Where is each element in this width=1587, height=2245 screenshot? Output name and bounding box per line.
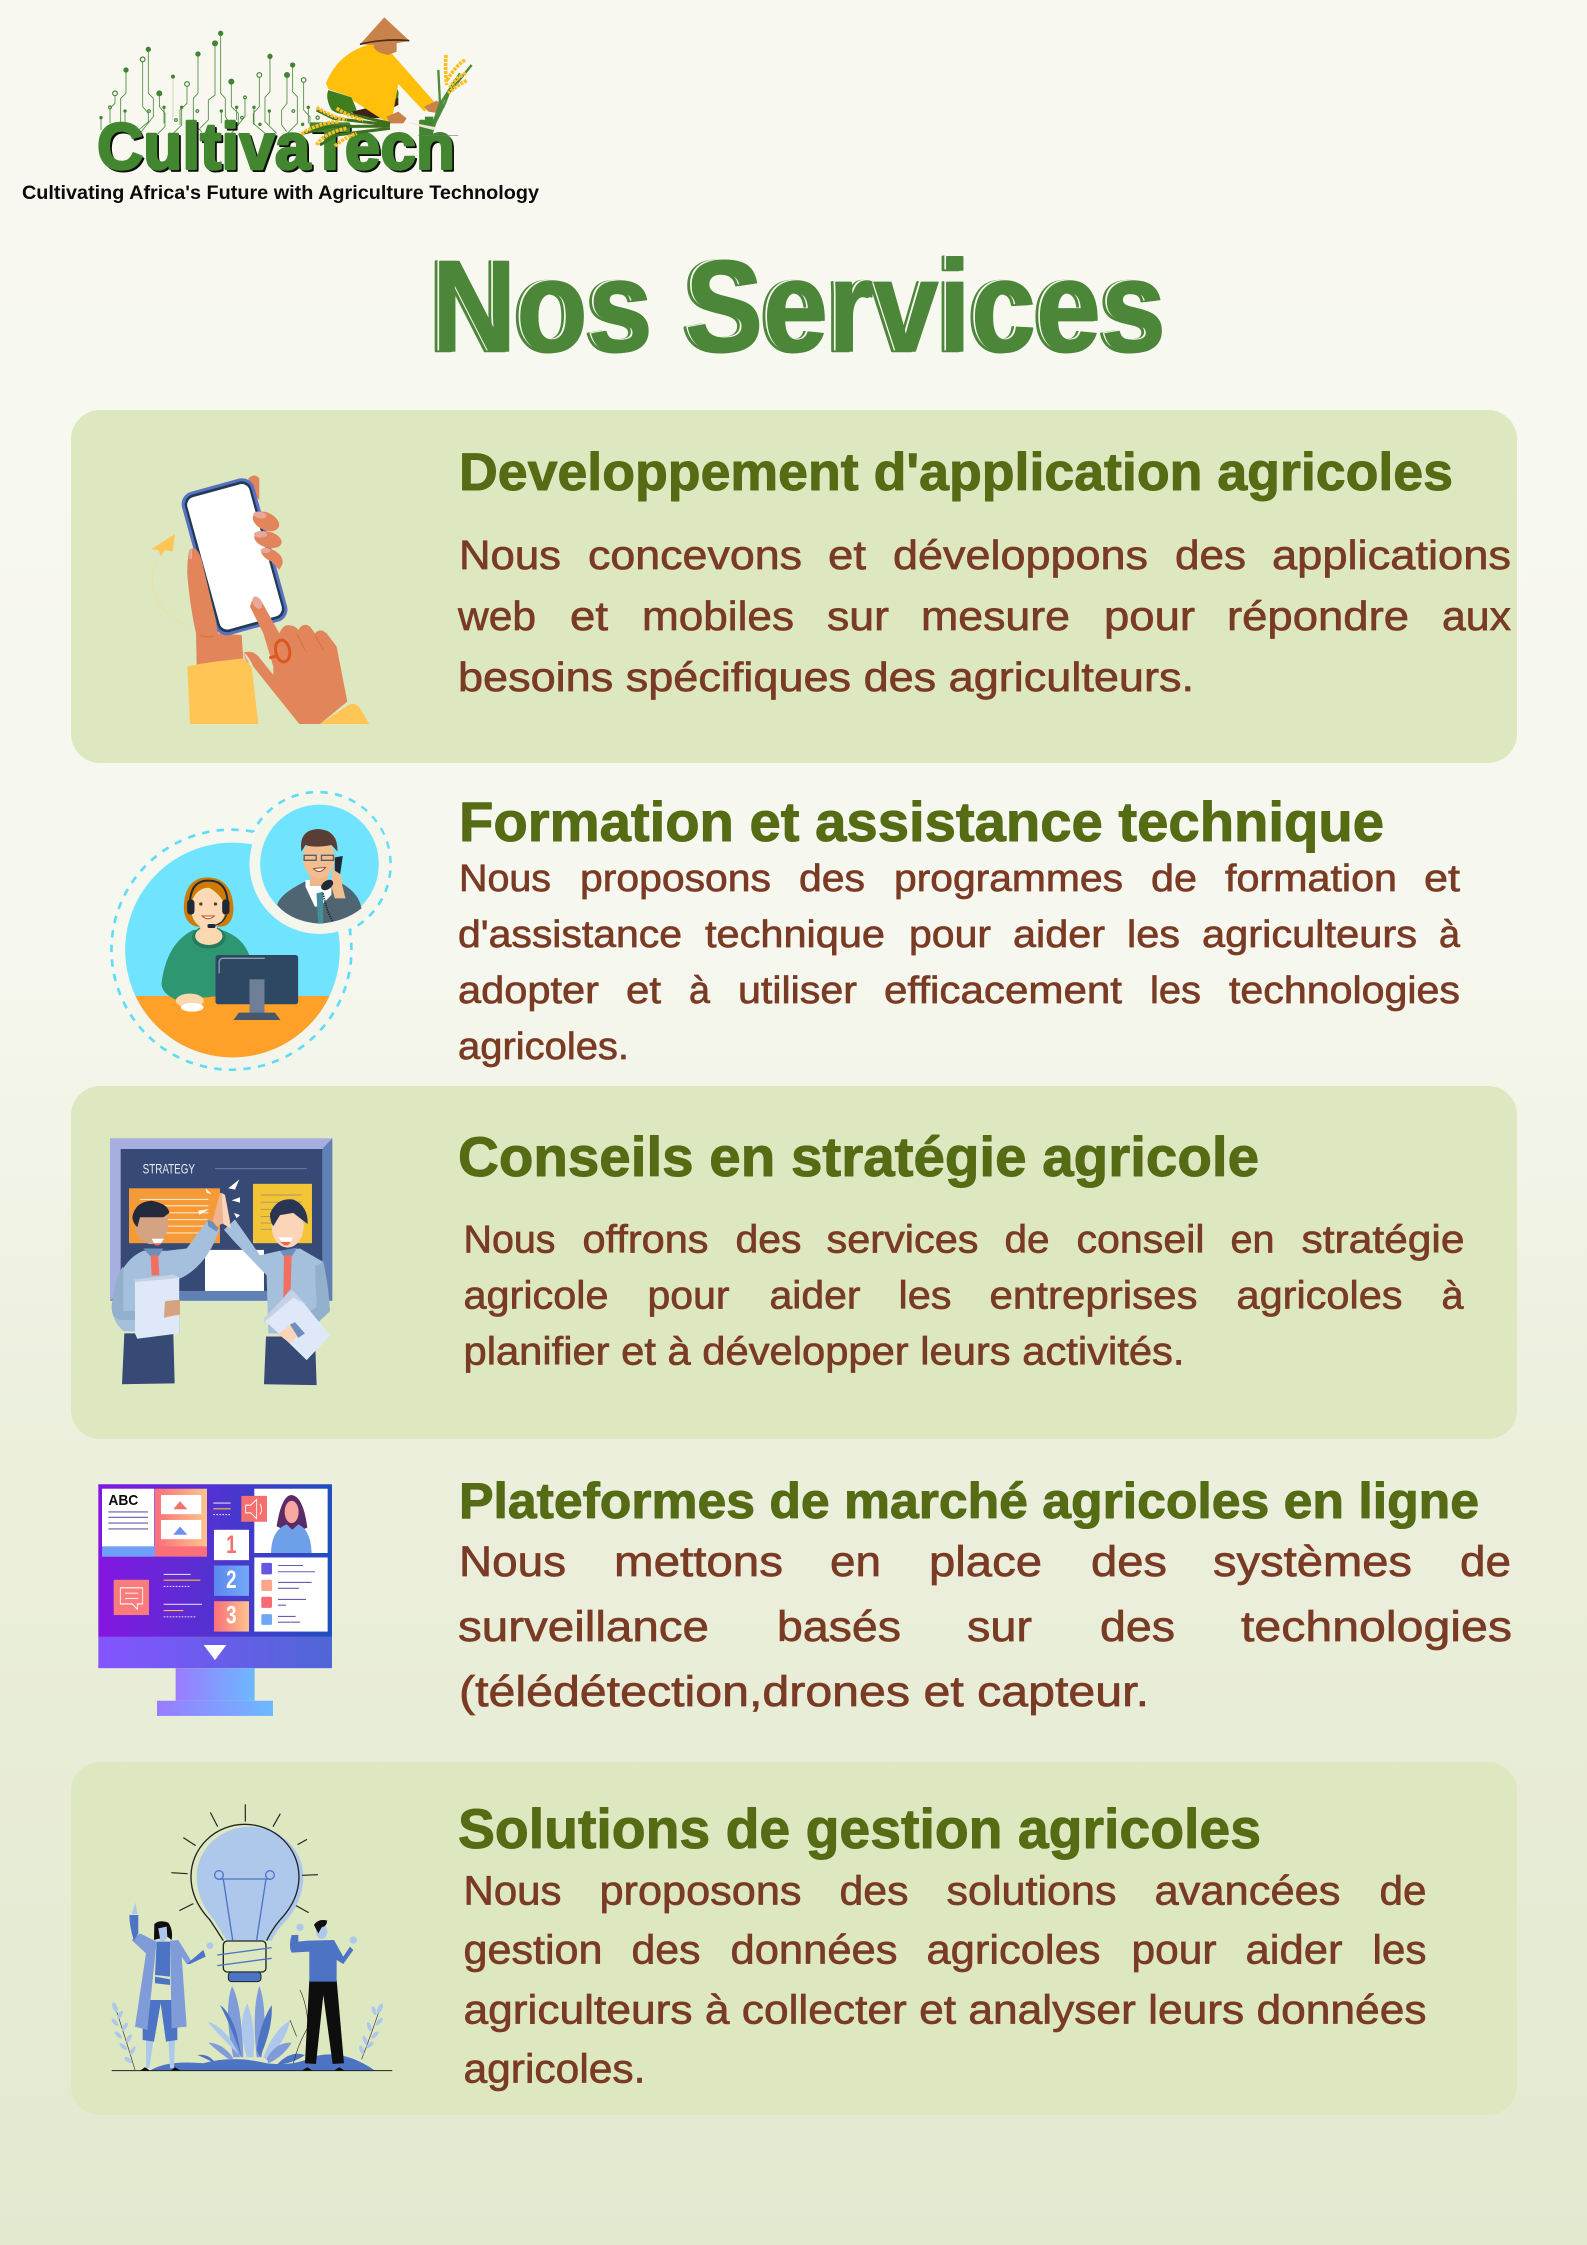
body text: des [840,1868,908,1914]
hills [150,2054,375,2071]
body text: en [1230,1218,1274,1262]
body text: de [1004,1218,1050,1262]
body text: stratégie [1302,1218,1464,1262]
rice right [430,65,472,133]
body text: solutions [946,1868,1116,1914]
body text: services [826,1218,978,1262]
icon: monitor with online marketplace: 1 [226,1530,237,1559]
body text: proposons [580,858,771,900]
body text: Nous [459,1538,566,1586]
body text: aider [1246,1926,1342,1972]
body text: et [570,593,609,639]
body text: aider [770,1274,860,1318]
body text: aider [1013,914,1105,956]
body text: les [1150,970,1201,1012]
panel: formation et assistance [111,790,1461,1070]
body text: des [1091,1538,1167,1586]
body text: pour [648,1274,730,1318]
body text: sur [827,593,889,639]
body text: des [1175,532,1246,578]
woman [146,2038,175,2068]
body text: aux [1442,593,1512,639]
icon: monitor with online marketplace: 3 [226,1601,237,1629]
heading: Plateformes de marché agricoles en ligne [459,1473,1479,1529]
body text: entreprises [990,1274,1198,1318]
heading: Conseils en stratégie agricole [458,1125,1259,1188]
body text [464,1218,1464,1374]
body text: mobiles [642,593,794,639]
body text: Nous [464,1868,562,1914]
heading: Solutions de gestion agricoles [458,1797,1261,1860]
body text: planifier et à développer leurs activités. [464,1330,1184,1374]
body text: systèmes [1213,1538,1412,1586]
body text: Nous [464,1218,556,1262]
tagline: Cultivating Africa's Future with Agriculture Technology [22,182,539,204]
body text: mesure [921,593,1070,639]
man [305,1980,344,2064]
panel: solutions de gestion [71,1762,1517,2115]
body text: web [457,593,536,639]
body text: répondre [1227,593,1409,639]
body text: à [1442,1274,1464,1318]
body text: technologies [1241,1603,1512,1651]
body text: efficacement [884,970,1122,1012]
body text: agricoles. [464,2046,646,2092]
body text: des [736,1218,802,1262]
body text: de [1380,1868,1426,1914]
body text: programmes [894,858,1123,900]
body text: de [1151,858,1197,900]
body text: données [730,1926,898,1972]
body text: les [1372,1926,1426,1972]
body text: agricoles. [458,1026,629,1068]
body text: en [830,1538,881,1586]
body text: surveillance [458,1603,709,1651]
panel: conseils en stratégie [71,1086,1517,1439]
body text: utiliser [738,970,857,1012]
body text: les [898,1274,952,1318]
body text: à [1439,914,1461,956]
body text: agricoles [926,1926,1100,1972]
heading: Formation et assistance technique [459,790,1384,853]
logo wordmark: CultivaTech [97,109,455,183]
side plants [117,1990,380,2070]
body text: développons [893,532,1148,578]
body text: des [1100,1603,1175,1651]
body text: d'assistance [458,914,682,956]
body text: agricoles [1236,1274,1402,1318]
heading: Developpement d'application agricoles [459,443,1453,502]
icon: support call [111,792,391,1070]
body text: adopter [458,970,599,1012]
body text [458,858,1461,1068]
body text: basés [777,1603,901,1651]
panel: plateformes de marché [98,1473,1512,1716]
body text [457,532,1512,700]
body text: applications [1272,532,1511,578]
icon: strategy board with two men [110,1138,332,1385]
body text: gestion [464,1926,602,1972]
body text: mettons [614,1538,783,1586]
body text: pour [909,914,991,956]
leaves [228,1986,264,2057]
body text: Nous [459,858,551,900]
body text [458,1538,1512,1716]
body text: Nous [459,532,561,578]
body text: proposons [600,1868,802,1914]
body text: et [828,532,867,578]
bulb [197,1827,303,1941]
body text: formation [1225,858,1397,900]
body text: besoins spécifiques des agriculteurs. [458,654,1194,700]
body text: place [929,1538,1042,1586]
body text: pour [1132,1926,1216,1972]
body text: des [632,1926,700,1972]
body text: technologies [1229,970,1460,1012]
body text: technique [705,914,885,956]
body text [464,1868,1426,2092]
icon: hand holding phone [151,475,369,724]
icon: strategy board with two men: STRATEGY [143,1161,195,1177]
icon: circuit lines [99,31,319,137]
body text: de [1460,1538,1511,1586]
title: Nos Services [430,232,1164,378]
panel: développement d'application [71,410,1517,763]
body text: sur [967,1603,1032,1651]
title: Nos Services [432,233,1166,379]
icon: light bulb with two people [110,1804,392,2071]
body text: les [1127,914,1180,956]
body text: concevons [588,532,802,578]
body text: et [1424,858,1460,900]
logo wordmark: CultivaTech [99,111,457,185]
icon: monitor with online marketplace: ABC [108,1492,139,1509]
body text: avancées [1154,1868,1340,1914]
body text: agriculteurs à collecter et analyser leurs données [464,1986,1426,2032]
logo: CultivaTech [97,17,472,185]
title: Nos Services [428,233,1162,379]
rice left [303,110,390,145]
icon: monitor with online marketplace [98,1484,332,1716]
body text: agriculteurs [1202,914,1417,956]
body text: conseil [1076,1218,1204,1262]
icon: monitor with online marketplace: 2 [226,1565,237,1593]
body text: offrons [582,1218,708,1262]
body text: agricole [464,1274,608,1318]
body text: pour [1104,593,1195,639]
icon: farmer with rice [302,17,472,146]
body text: et [626,970,661,1012]
body text: des [799,858,865,900]
body text: à [689,970,711,1012]
body text: (télédétection,drones et capteur. [459,1668,1149,1716]
